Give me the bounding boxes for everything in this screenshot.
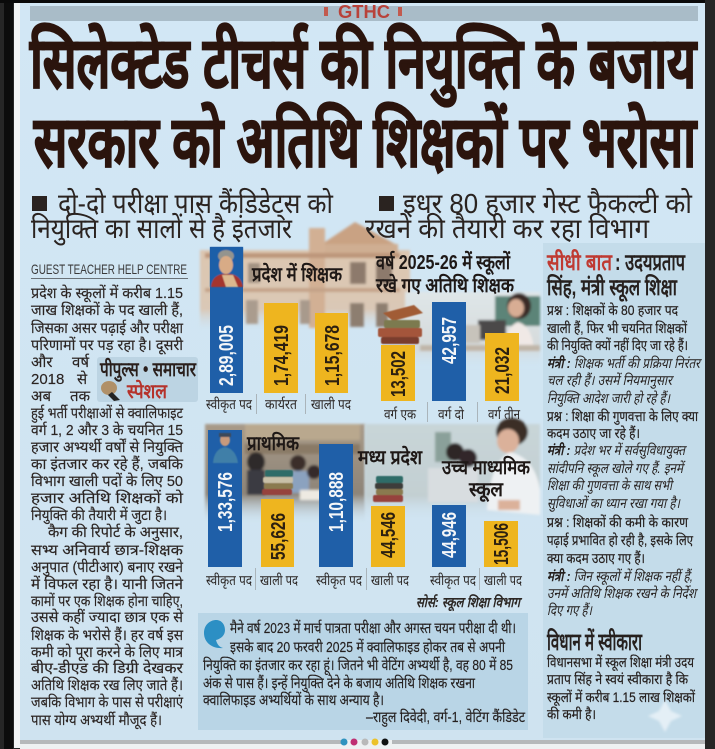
interview text: सुविधाओं का ध्यान रखा गया है। (547, 495, 681, 512)
top banner: GTHC (30, 2, 698, 22)
interview text: क्या कदम उठाए गए हैं। (547, 550, 645, 566)
bar: sanctioned posts (319, 444, 353, 567)
left article text: 2018 (31, 371, 64, 388)
bar: vacant posts: 1,15,678 (322, 325, 344, 386)
interview text: मंत्री : जिन स्कूलों में शिक्षक नहीं हैं, (547, 568, 693, 585)
left article text: शिक्षक के भरोसे हैं। हर वर्ष इस (31, 626, 184, 644)
chart: higher secondary school (430, 455, 531, 590)
sidebar subheading: विधान में स्वीकारा (546, 628, 642, 656)
interview text: चल रही हैं। उसमें नियमानुसार (547, 372, 675, 389)
bottom colour dots (20, 738, 705, 746)
chart title: मध्य प्रदेश (357, 445, 423, 469)
axis labels: स्वीकृत पद (206, 396, 252, 413)
left article text: पास योग्य अभ्यर्थी मौजूद हैं। (31, 711, 162, 730)
left article text: जाख शिक्षकों के पद खाली हैं, (31, 301, 183, 319)
quote text: नियुक्ति का इंतजार कर रहा हूं। जितने भी वेटिंग अभ्यर्थी है, वह 80 में 85 (203, 656, 513, 676)
left article text: अतिथि शिक्षक रख लिए जाते हैं। (31, 676, 183, 694)
sidebar heading: सीधी बात (546, 248, 613, 275)
chart: guest teachers 2025-26 (375, 250, 520, 422)
quote text: मैने वर्ष 2023 में मार्च पात्रता परीक्षा और अगस्त चयन परीक्षा दी थी। (230, 619, 516, 637)
icon: stack of books (262, 470, 293, 495)
top banner: GTHC: GTHC (338, 2, 390, 22)
left article text: वर्ग 1, 2 और 3 के चयनित 15 (31, 421, 183, 439)
interview text: नियुक्ति आदेश जारी हो रहे हैं। (547, 390, 671, 407)
chart title: प्राथमिक (246, 431, 300, 455)
subheading: right: इधर 80 हजार गेस्ट फैकल्टी को (403, 187, 693, 219)
chart title (441, 455, 531, 502)
bar: class one: 13,502 (388, 351, 410, 397)
badge: peoples samachar special: पीपुल्स • समाचार (99, 357, 197, 382)
subheading: right (365, 187, 693, 244)
byline: guest teacher help centre: GUEST TEACHER HELP CENTRE (31, 261, 187, 277)
axis labels (384, 402, 520, 422)
bar: sanctioned posts: 1,10,888 (326, 472, 348, 532)
interview text: मंत्री : प्रदेश भर में सर्वसुविधायुक्त (547, 442, 687, 459)
axis labels: खाली पद (371, 572, 409, 588)
admission text: प्रताप सिंह ने स्वयं स्वीकारा है कि (547, 671, 688, 687)
bar: class three: 21,032 (492, 347, 514, 394)
bar: working (264, 303, 298, 393)
chart: teachers in the state (206, 247, 351, 414)
chart title: रखे गए अतिथि शिक्षक (375, 273, 515, 297)
sidebar heading (546, 248, 686, 302)
bar: vacant posts (315, 313, 348, 393)
chart title (375, 250, 515, 297)
left article text: अब (31, 388, 51, 405)
chart title: वर्ष 2025-26 में स्कूलों (375, 250, 511, 275)
chart: madhya pradesh (316, 444, 423, 590)
left article text: और (31, 353, 53, 371)
bar: sanctioned posts (208, 430, 242, 567)
chart title: स्कूल (468, 479, 504, 502)
bar: vacant posts (261, 499, 294, 567)
bar: sanctioned posts (210, 247, 243, 393)
axis labels: खाली पद (484, 572, 522, 588)
left article text: का इंतजार कर रहे हैं, जबकि (31, 455, 183, 473)
left article text: नियुक्ति की तैयारी में जुटा है। (31, 506, 167, 525)
axis labels: वर्ग तीन (488, 406, 520, 422)
subheading: left: नियुक्ति का सालों से है इंतजार (31, 212, 292, 246)
bar: vacant posts: 15,506 (491, 523, 513, 565)
icon: sparkle (648, 700, 682, 732)
icon: hand with pen (101, 381, 120, 401)
left article text: अनुपात (पीटीआर) बनाए रखने (31, 558, 184, 577)
photo: teacher in classroom (405, 292, 540, 368)
bar: vacant posts: 44,546 (378, 512, 400, 558)
left article text: हजार अभ्यर्थी वर्षों से नियुक्ति (31, 438, 183, 457)
left article text: उससे कहीं ज्यादा छात्र एक से (31, 608, 184, 626)
left article text: सभ्य अनिवार्य छात्र-शिक्षक (31, 541, 184, 559)
title (29, 23, 698, 181)
axis labels: खाली पद (311, 396, 351, 412)
bar: class two: 42,957 (439, 317, 461, 364)
bar: class two (432, 302, 466, 401)
axis labels (206, 568, 298, 590)
axis labels: स्वीकृत पद (206, 572, 252, 589)
bar: working: 1,74,419 (271, 325, 293, 386)
left article text: वर्ष (72, 353, 90, 371)
bar: class three (485, 333, 519, 401)
axis labels (206, 394, 351, 414)
left article text: कैग की रिपोर्ट के अनुसार, (48, 523, 183, 542)
chart title: प्रदेश में शिक्षक (251, 262, 343, 286)
photo: library students (205, 424, 365, 524)
left article text: प्रदेश के स्कूलों में करीब 1.15 (31, 284, 183, 303)
left article text: कमी को पूरा करने के लिए मात्र (31, 643, 184, 662)
interview text: खाली हैं, फिर भी चयनित शिक्षकों (547, 320, 687, 336)
left article text: तक (70, 388, 91, 405)
axis labels (430, 568, 522, 590)
interview text: सांदीपनि स्कूल खोले गए हैं. इनमें (547, 460, 685, 477)
interview text: प्रश्न : शिक्षकों के 80 हजार पद (547, 302, 678, 318)
icon: stack of books (378, 305, 423, 344)
axis labels: वर्ग एक (384, 406, 416, 422)
bar: class one (381, 345, 415, 401)
icon: quote mark (204, 620, 225, 648)
axis labels: वर्ग दो (438, 406, 464, 422)
axis labels: खाली पद (260, 572, 298, 588)
bar: sanctioned posts: 2,89,005 (216, 325, 238, 386)
sidebar heading: : उदयप्रताप (615, 249, 686, 275)
axis labels: स्वीकृत पद (316, 572, 362, 589)
badge: peoples samachar special: स्पेशल (126, 379, 168, 403)
sidebar: minister interview (543, 243, 705, 738)
left article text: बीए-डीएड की डिग्री देखकर (31, 659, 184, 677)
photo: science lab students (365, 418, 540, 520)
bar: vacant posts (371, 506, 405, 567)
axis labels: स्वीकृत पद (430, 572, 476, 589)
left article text: जबकि विभाग के पास से परीक्षाएं (31, 693, 184, 711)
interview text: शिक्षा की गुणवत्ता के साथ सभी (547, 477, 675, 494)
left article text (31, 284, 184, 730)
bar: sanctioned posts: 1,33,576 (215, 472, 237, 532)
left article text: से (77, 370, 88, 388)
admission text (547, 654, 695, 722)
icon: male teacher (213, 433, 238, 463)
subheading: left: दो-दो परीक्षा पास कैंडिडेट्स को (58, 187, 334, 221)
chart: primary (206, 430, 300, 590)
quote text: अंक से पास हैं। इन्हें नियुक्ति देने के बजाय अतिथि शिक्षक रखना (203, 674, 476, 693)
badge: peoples samachar special (97, 357, 198, 403)
quote text: इसके बाद 20 फरवरी 2025 में क्वालिफाइड होकर तब से अपनी (230, 638, 506, 656)
left article text: हजार अतिथि शिक्षकों को (31, 489, 184, 507)
subheading: left (31, 187, 334, 246)
source note: सोर्स: स्कूल शिक्षा विभाग (416, 594, 523, 612)
interview text: प्रश्न : शिक्षकों की कमी के कारण (547, 514, 689, 530)
icon: woman in sari (210, 247, 243, 287)
left article text: कामों पर एक शिक्षक होना चाहिए, (31, 592, 183, 610)
left article text: विभाग खाली पदों के लिए 50 (31, 472, 183, 490)
icon: stack of books (373, 476, 403, 502)
admission text: की कमी है। (547, 706, 596, 722)
interview text (547, 302, 703, 618)
left article text: परिणामों पर पड़ रहा है। दूसरी (31, 336, 184, 355)
bar: sanctioned posts: 44,946 (439, 512, 461, 558)
axis labels (316, 568, 409, 590)
callout: candidate quote (198, 613, 528, 730)
subheading: right: रखने की तैयारी कर रहा विभाग (365, 212, 650, 244)
left article text: जिसका असर पढ़ाई और परीक्षा (31, 319, 184, 337)
left article text: में विफल रहा है। यानी जितने (31, 575, 184, 593)
quote text (203, 619, 525, 727)
interview text: दिए गए हैं। (547, 602, 593, 618)
photo: school building (200, 222, 410, 332)
interview text: कदम उठाए जा रहे हैं। (547, 425, 640, 441)
axis labels: कार्यरत (265, 396, 298, 412)
left article text: हुई भर्ती परीक्षाओं से क्वालिफाइट (31, 404, 183, 423)
chart title: उच्च माध्यमिक (441, 455, 531, 479)
quote text: क्वालिफाइड अभ्यर्थियों के साथ अन्याय है। (203, 691, 384, 709)
bar: vacant posts: 55,626 (268, 513, 290, 560)
quote text: –राहुल दिवेदी, वर्ग-1, वेटिंग कैंडिडेट (366, 708, 525, 727)
